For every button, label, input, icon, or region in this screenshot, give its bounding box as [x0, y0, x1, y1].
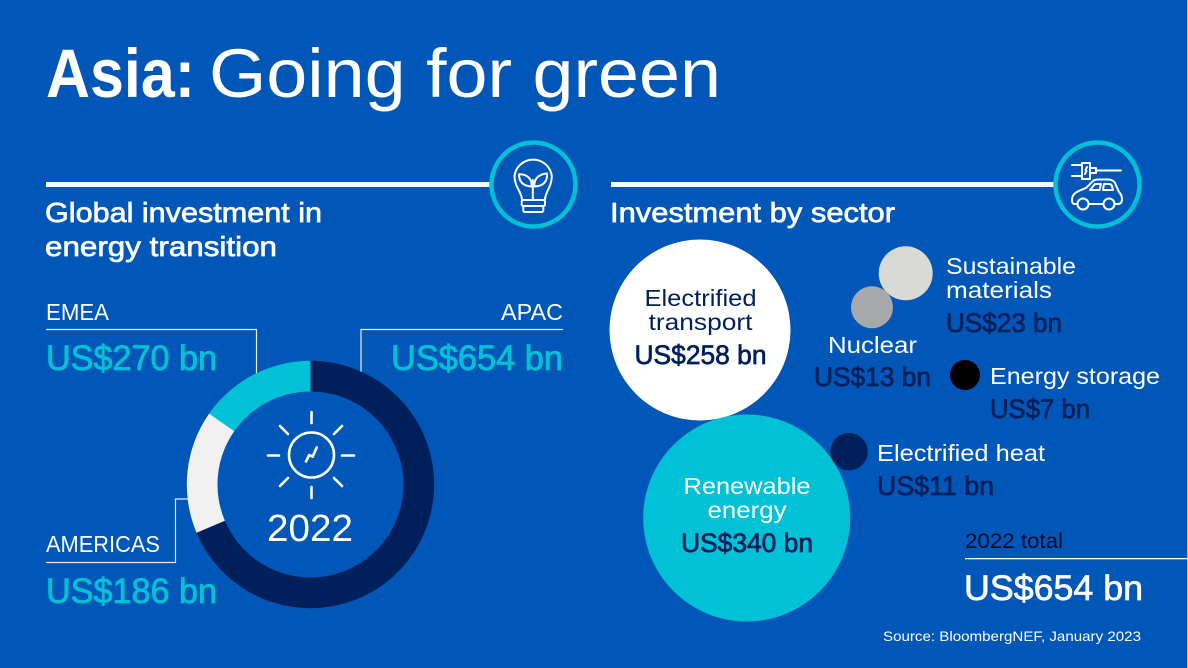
bubble: nuclear: US$13 bn	[814, 362, 931, 392]
bubble: energy storage: Energy storage	[990, 363, 1160, 389]
bubble: nuclear: Nuclear	[828, 332, 917, 358]
bubble: electrified transport: Electrified	[644, 285, 756, 311]
donut year label: 2022	[267, 508, 353, 550]
label: EMEA: US$270 bn	[46, 339, 217, 378]
total callout: 2022 total	[965, 530, 1063, 553]
heading: global investment	[45, 197, 322, 262]
label: EMEA: EMEA	[46, 299, 110, 325]
label: Americas	[46, 531, 217, 611]
icon: light bulb with leaves	[492, 142, 576, 226]
label: APAC: APAC	[501, 299, 563, 325]
label: EMEA	[46, 299, 217, 378]
bubble: nuclear	[814, 286, 931, 392]
bubble: sustainable materials: materials	[946, 277, 1052, 303]
heading: global investment: Global investment in	[45, 197, 322, 228]
source note: Source: BloombergNEF, January 2023	[883, 628, 1141, 644]
bubble: sustainable materials: Sustainable	[946, 253, 1076, 279]
bubble: renewable energy: US$340 bn	[681, 528, 813, 558]
bubble: renewable energy: Renewable	[684, 473, 810, 499]
bubble: energy storage: US$7 bn	[990, 394, 1090, 424]
bubble: electrified transport: US$258 bn	[634, 340, 766, 370]
bubble: renewable energy: energy	[708, 497, 787, 523]
label: Americas: US$186 bn	[46, 572, 217, 611]
total callout	[964, 530, 1188, 608]
bubble: electrified transport: transport	[648, 309, 753, 335]
label: Americas: AMERICAS	[46, 531, 160, 557]
bubble: energy storage	[950, 360, 1160, 424]
bubble: renewable energy	[643, 414, 850, 622]
bubble: electrified heat: US$11 bn	[877, 471, 994, 501]
icon: sun with bolt	[268, 412, 354, 498]
title: Going for green	[209, 35, 721, 112]
bubble: sustainable materials	[879, 246, 1076, 338]
title: Asia:	[46, 35, 195, 112]
label: APAC: US$654 bn	[391, 339, 563, 378]
label: APAC	[391, 299, 563, 378]
bubble: electrified heat: Electrified heat	[877, 440, 1046, 466]
bubble: electrified transport	[610, 240, 790, 420]
icon: plug and electric car	[1056, 142, 1140, 226]
bubble: electrified heat	[830, 433, 1046, 501]
donut chart	[187, 361, 434, 608]
bubble: sustainable materials: US$23 bn	[946, 308, 1062, 338]
heading: investment by sector: Investment by sector	[610, 197, 895, 228]
heading: global investment: energy transition	[45, 231, 277, 262]
leader lines	[46, 330, 563, 562]
total callout: US$654 bn	[964, 569, 1143, 608]
